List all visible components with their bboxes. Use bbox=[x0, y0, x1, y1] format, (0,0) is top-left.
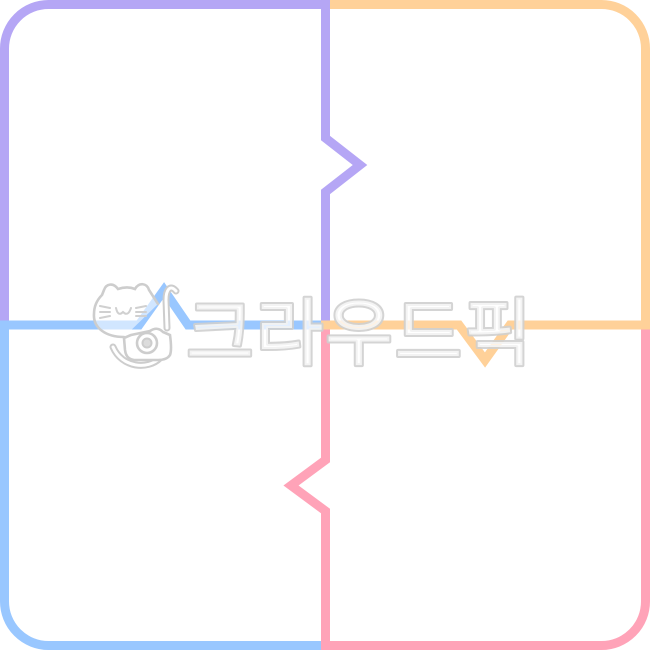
icon: cat tail inner bbox=[113, 288, 176, 365]
panel: top-right orange piece bbox=[321, 4, 646, 360]
panel: bottom-right pink piece bbox=[291, 329, 646, 646]
watermark: cat and camera logo bbox=[94, 284, 176, 365]
watermark: wordmark outline: 크라우드픽 bbox=[186, 292, 532, 375]
panel: top-left purple piece bbox=[4, 4, 360, 320]
icon: cat head bbox=[94, 284, 158, 337]
icon: camera lens centre bbox=[142, 338, 152, 348]
icon: camera body bbox=[124, 329, 171, 360]
icon: camera lens bbox=[137, 333, 157, 353]
icon: cat tail outer bbox=[113, 288, 176, 365]
icon: cat face bbox=[100, 306, 146, 318]
watermark: wordmark inner highlight: 크라우드픽 bbox=[186, 292, 532, 375]
panel: bottom-left blue piece bbox=[4, 290, 321, 646]
